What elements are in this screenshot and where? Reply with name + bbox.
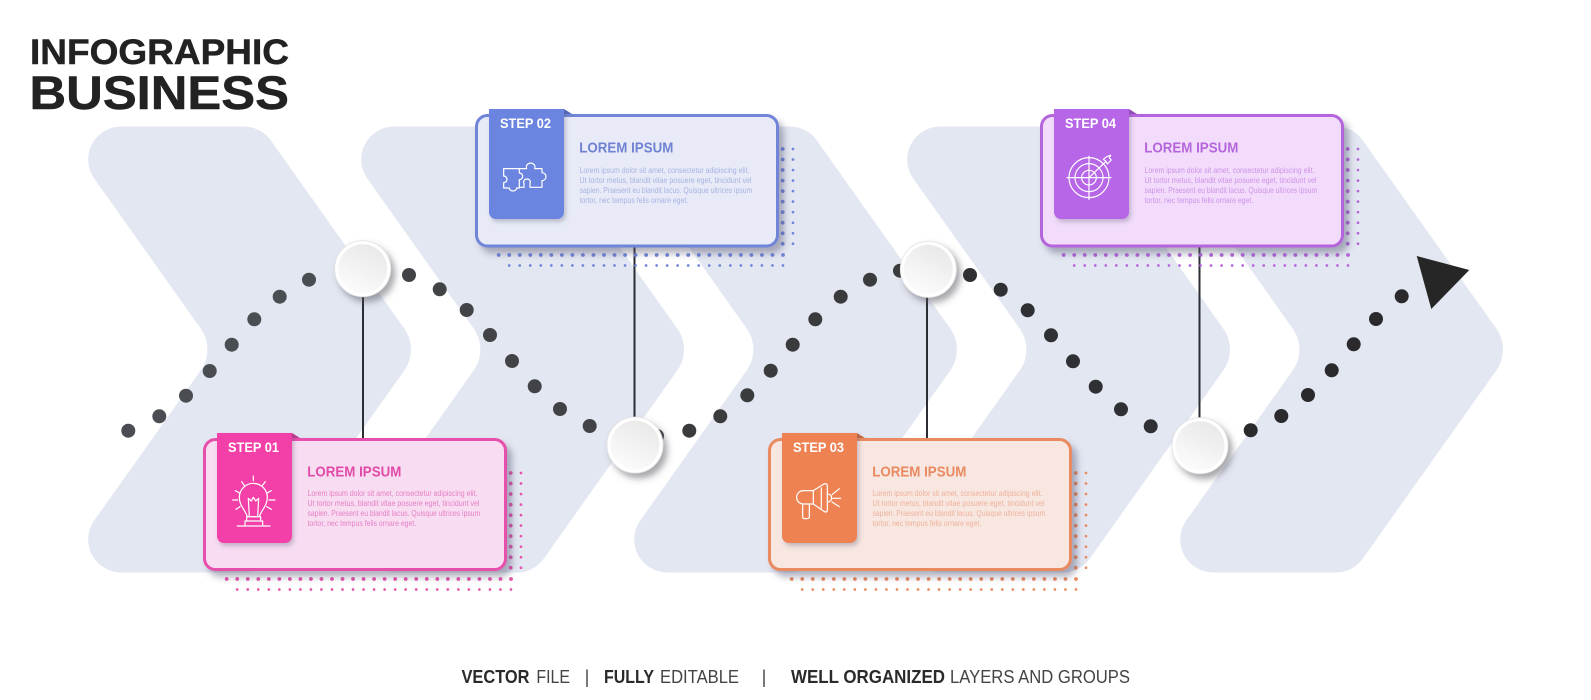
panel <box>1042 116 1342 246</box>
body text <box>580 165 752 205</box>
body text: sapien. Praesent eu blandit lacus. Quisque ultrices ipsum <box>580 185 752 195</box>
panel <box>770 440 1070 570</box>
card: step 04 <box>1042 109 1358 266</box>
body text <box>872 488 1045 528</box>
body text: sapien. Praesent eu blandit lacus. Quisque ultrices ipsum <box>308 508 480 518</box>
step tab <box>217 433 300 543</box>
panel <box>204 440 506 570</box>
panel <box>476 116 778 246</box>
halftone dots <box>1064 149 1358 266</box>
body text <box>1144 165 1317 205</box>
footer: FULLY <box>604 667 654 687</box>
step label: STEP 02 <box>500 115 551 131</box>
step tab <box>1054 109 1137 219</box>
halftone dots <box>792 473 1086 590</box>
footer <box>462 667 1130 687</box>
title: BUSINESS <box>30 66 289 119</box>
footer: FILE <box>536 667 570 687</box>
heading: LOREM IPSUM <box>579 140 673 156</box>
footer: EDITABLE <box>660 667 739 687</box>
body text: sapien. Praesent eu blandit lacus. Quisque ultrices ipsum <box>1144 185 1317 195</box>
body text: tortor, nec tempus felis ornare eget. <box>580 195 688 205</box>
body text: Lorem ipsum dolor sit amet, consectetur adipiscing elit. <box>308 488 478 498</box>
body text: Lorem ipsum dolor sit amet, consectetur adipiscing elit. <box>1144 165 1314 175</box>
body text <box>308 488 480 528</box>
icon: light bulb <box>233 476 275 526</box>
body text: Lorem ipsum dolor sit amet, consectetur adipiscing elit. <box>872 488 1042 498</box>
step label: STEP 03 <box>793 439 844 455</box>
icon: megaphone <box>797 484 841 519</box>
body text: tortor, nec tempus felis ornare eget. <box>872 518 981 528</box>
body text: Ut tortor metus, blandit vitae posuere eget, tincidunt vel <box>580 175 752 185</box>
step tab <box>782 433 865 543</box>
connector lines <box>363 244 1200 440</box>
step label: STEP 04 <box>1065 115 1116 131</box>
dotted path <box>121 264 1409 443</box>
heading: LOREM IPSUM <box>1144 140 1238 156</box>
card: step 03 <box>770 433 1086 590</box>
body text: Ut tortor metus, blandit vitae posuere eget, tincidunt vel <box>308 498 480 508</box>
card: step 01 <box>204 433 521 590</box>
heading: LOREM IPSUM <box>307 464 401 480</box>
footer: WELL ORGANIZED <box>791 667 945 687</box>
body text: tortor, nec tempus felis ornare eget. <box>308 518 416 528</box>
halftone dots <box>227 473 521 590</box>
title <box>30 33 289 119</box>
icon: puzzle <box>504 163 546 191</box>
footer: VECTOR <box>462 667 530 687</box>
footer: | <box>762 667 766 687</box>
footer: LAYERS AND GROUPS <box>950 667 1130 687</box>
title: INFOGRAPHIC <box>30 33 289 72</box>
body text: Lorem ipsum dolor sit amet, consectetur adipiscing elit. <box>580 165 750 175</box>
card: step 02 <box>476 109 793 266</box>
body text: tortor, nec tempus felis ornare eget. <box>1144 195 1253 205</box>
node circle 2 <box>607 417 663 473</box>
background chevrons <box>88 126 1503 572</box>
body text: Ut tortor metus, blandit vitae posuere eget, tincidunt vel <box>872 498 1045 508</box>
icon: target <box>1067 155 1111 199</box>
node circle 4 <box>1172 418 1228 474</box>
step tab <box>489 109 572 219</box>
node circle 1 <box>335 241 391 297</box>
step label: STEP 01 <box>228 439 279 455</box>
halftone dots <box>499 149 793 266</box>
body text: sapien. Praesent eu blandit lacus. Quisque ultrices ipsum <box>872 508 1045 518</box>
node circle 3 <box>900 241 956 297</box>
heading: LOREM IPSUM <box>872 464 966 480</box>
arrow head <box>1417 256 1469 309</box>
footer: | <box>585 667 589 687</box>
body text: Ut tortor metus, blandit vitae posuere eget, tincidunt vel <box>1144 175 1317 185</box>
